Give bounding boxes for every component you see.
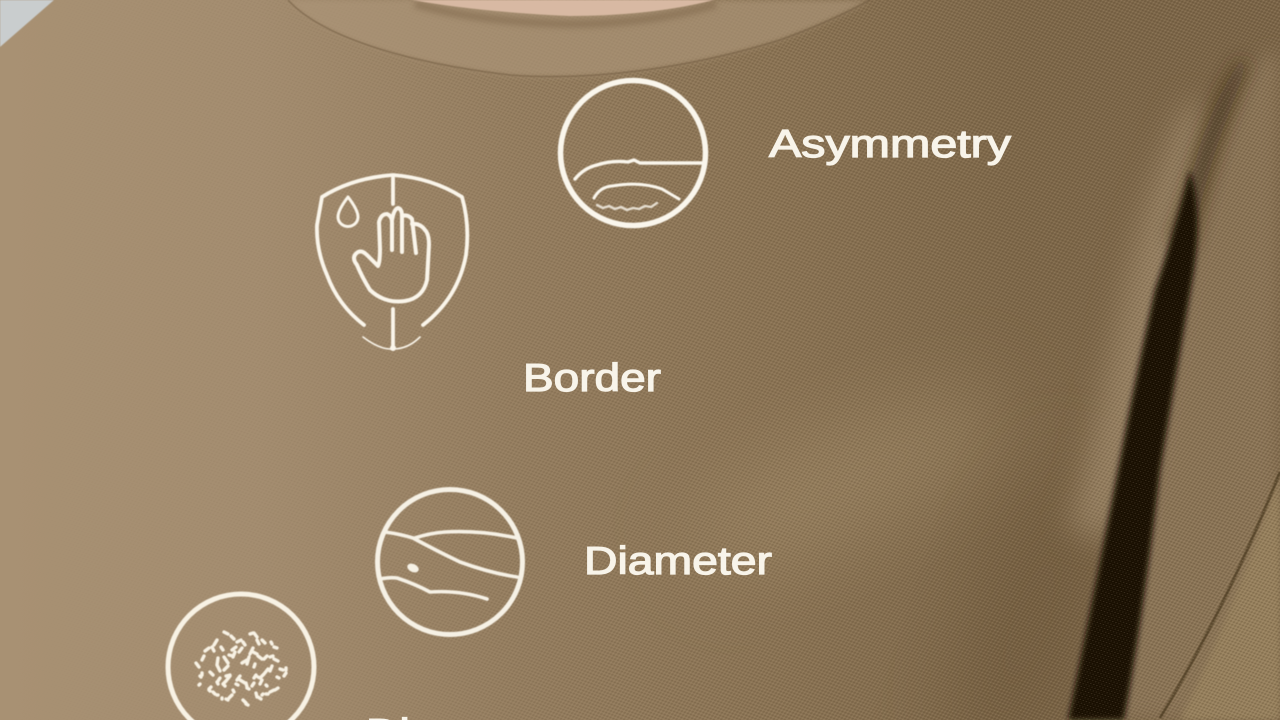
label: Diameter: Diameter bbox=[584, 540, 772, 583]
icon: speckled circle bbox=[168, 594, 314, 720]
icon: diameter circle bbox=[378, 490, 522, 634]
icon: shield with hand and drop bbox=[317, 175, 467, 351]
collar band bbox=[288, 0, 870, 77]
label: Border: Border bbox=[523, 357, 661, 400]
backdrop corner bbox=[0, 0, 54, 47]
icon: asymmetry circle bbox=[560, 80, 706, 226]
skin at neckline bbox=[412, 0, 714, 16]
label: Asymmetry: Asymmetry bbox=[769, 123, 1012, 166]
speckle cluster bbox=[196, 632, 286, 705]
